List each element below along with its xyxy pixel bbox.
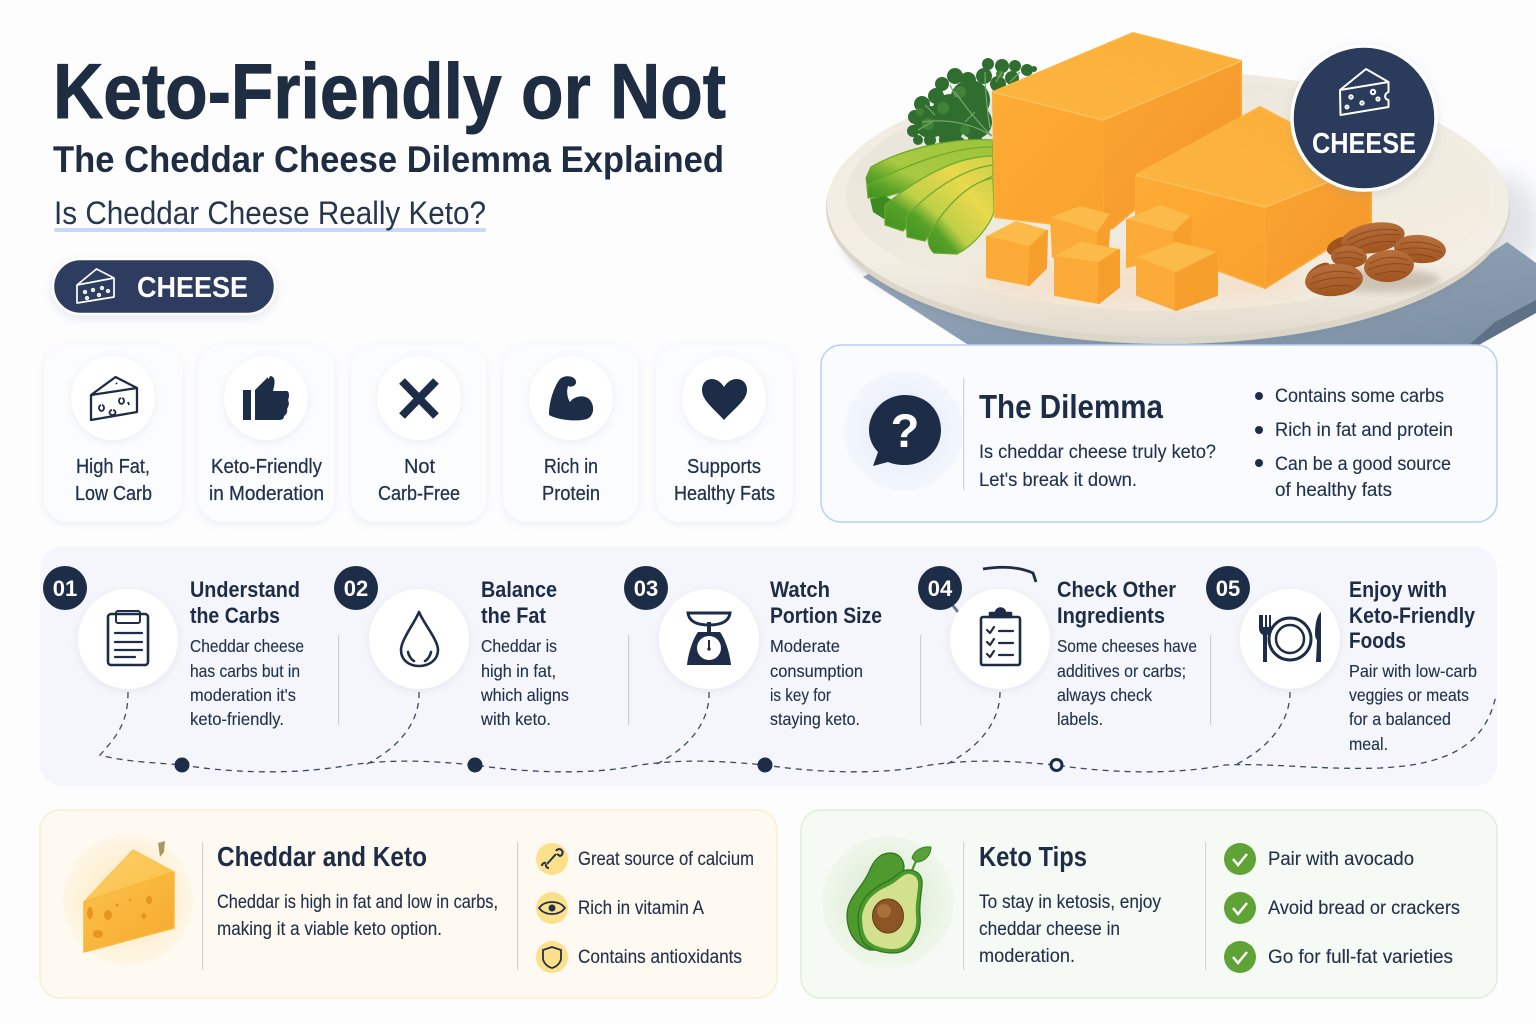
title: Keto-Friendly or Not xyxy=(53,47,726,135)
step 03: Watch xyxy=(770,577,830,602)
step 04: Ingredients xyxy=(1057,603,1165,628)
tip: full-fat xyxy=(1224,941,1453,973)
benefit card: keto-friendly: in Moderation xyxy=(209,483,324,505)
step 03: Moderate xyxy=(770,636,840,656)
step 01: moderation it's xyxy=(190,685,296,705)
step 04: always check xyxy=(1057,685,1152,705)
dilemma bullet list: Can be a good source xyxy=(1275,454,1451,475)
icon: heart xyxy=(702,379,747,420)
step 05: Enjoy with xyxy=(1349,577,1447,602)
tip: bread xyxy=(1224,892,1460,924)
almonds xyxy=(1303,218,1447,298)
plate xyxy=(826,71,1510,346)
step 01: the Carbs xyxy=(190,603,280,628)
step 01: Understand xyxy=(190,577,300,602)
step 03: is key for xyxy=(770,685,831,705)
item: calcium xyxy=(536,843,754,875)
icon: nutrition label xyxy=(108,611,148,665)
icon: cheese xyxy=(91,377,137,420)
benefit card: high fat: High Fat, xyxy=(76,456,150,478)
panel: keto tips xyxy=(801,810,1497,998)
panel: the dilemma: The Dilemma xyxy=(979,388,1164,425)
step 05: meal. xyxy=(1349,734,1388,754)
step 05: for a balanced xyxy=(1349,709,1451,729)
step 03: staying keto. xyxy=(770,709,860,729)
benefit card: healthy fats: Supports xyxy=(687,456,761,478)
tip: full-fat: Go for full-fat varieties xyxy=(1268,947,1453,968)
dilemma bullet list: Rich in fat and protein xyxy=(1275,420,1453,441)
icon: cheese wedge xyxy=(77,269,114,303)
panel: cheddar and keto: Cheddar is high in fat and low in carbs, xyxy=(217,892,498,913)
avocado slices xyxy=(866,140,994,254)
tip: avocado: Pair with avocado xyxy=(1268,849,1414,870)
benefit card: healthy fats xyxy=(656,345,793,522)
step 01: keto-friendly. xyxy=(190,709,284,729)
item: antioxidants xyxy=(536,941,742,973)
step 05 xyxy=(1206,566,1477,754)
step 02: 02 xyxy=(344,576,368,601)
panel: keto tips: cheddar cheese in xyxy=(979,919,1120,940)
parsley xyxy=(907,58,1037,147)
second cheese block xyxy=(1136,107,1371,288)
hero image: cheddar plate xyxy=(826,33,1536,346)
panel: cheddar and keto: Cheddar and Keto xyxy=(217,841,427,872)
cheese round badge: CHEESE xyxy=(1312,128,1416,160)
step 05: Keto-Friendly xyxy=(1349,603,1475,628)
step 02: which aligns xyxy=(480,685,569,705)
step 04: 04 xyxy=(928,576,953,601)
step 01: Cheddar cheese xyxy=(190,636,304,656)
step 04: Check Other xyxy=(1057,577,1176,602)
step 01 xyxy=(43,566,304,729)
panel: keto tips: To stay in ketosis, enjoy xyxy=(979,892,1161,913)
step 01: has carbs but in xyxy=(190,661,300,681)
napkin xyxy=(863,175,1536,346)
tip: avocado xyxy=(1224,843,1414,875)
step 04 xyxy=(918,566,1197,729)
icon: cheese xyxy=(1340,69,1388,115)
icon: question bubble xyxy=(869,395,941,466)
icon: droplet xyxy=(401,612,438,666)
dilemma bullet list: Contains some carbs xyxy=(1275,386,1444,407)
dilemma bullet list xyxy=(1255,386,1453,501)
panel: the dilemma: Is cheddar cheese truly keto? xyxy=(979,442,1216,463)
step 02 xyxy=(334,566,569,729)
item: vitamin A: Rich in vitamin A xyxy=(578,898,704,919)
illustration: cheese wedge xyxy=(84,841,174,952)
benefit card: high fat: Low Carb xyxy=(75,483,152,505)
item: calcium: Great source of calcium xyxy=(578,849,754,870)
tip: bread: Avoid bread or crackers xyxy=(1268,898,1460,919)
large cheese block xyxy=(993,33,1241,230)
dilemma bullet list: of healthy fats xyxy=(1275,480,1392,501)
benefit card: keto-friendly: Keto-Friendly xyxy=(211,456,322,478)
cheese pill badge xyxy=(53,259,275,314)
benefit card: keto-friendly xyxy=(198,345,335,522)
step 05: Foods xyxy=(1349,628,1406,653)
icon: plate and cutlery xyxy=(1259,612,1321,662)
benefit card: not carb-free xyxy=(351,345,487,522)
item: antioxidants: Contains antioxidants xyxy=(578,947,742,968)
icon: checklist xyxy=(981,608,1020,665)
icon: flexed arm xyxy=(549,376,593,420)
cheese round badge xyxy=(1292,46,1436,190)
step 03: 03 xyxy=(634,576,658,601)
step 01: 01 xyxy=(53,576,77,601)
step 03: consumption xyxy=(770,661,863,681)
benefit card: protein: Protein xyxy=(542,483,600,505)
benefit card: healthy fats: Healthy Fats xyxy=(674,483,775,505)
step 05: 05 xyxy=(1216,576,1240,601)
benefit card: not carb-free: Carb-Free xyxy=(378,483,460,505)
benefit card: protein: Rich in xyxy=(544,456,598,478)
cheese cubes xyxy=(987,206,1217,310)
step 04: additives or carbs; xyxy=(1057,661,1186,681)
panel: keto tips: Keto Tips xyxy=(979,841,1087,872)
panel: keto tips: moderation. xyxy=(979,946,1075,967)
step 03: Portion Size xyxy=(770,603,882,628)
panel: steps xyxy=(40,547,1497,786)
panel: cheddar and keto: making it a viable keto option. xyxy=(217,919,442,940)
step 05: Pair with low-carb xyxy=(1349,661,1477,681)
step 05: veggies or meats xyxy=(1349,685,1469,705)
step 02: with keto. xyxy=(480,709,551,729)
illustration: avocado xyxy=(847,847,931,953)
cheese pill badge: CHEESE xyxy=(137,272,248,304)
step 03 xyxy=(624,566,882,729)
icon: thumbs up xyxy=(243,376,289,420)
benefit card: high fat xyxy=(44,345,182,522)
subtitle: The Cheddar Cheese Dilemma Explained xyxy=(53,139,724,180)
item: vitamin A xyxy=(536,892,704,924)
panel: the dilemma xyxy=(821,345,1497,522)
step 02: the Fat xyxy=(481,603,546,628)
step 04: labels. xyxy=(1057,709,1103,729)
panel: the dilemma: Let's break it down. xyxy=(979,470,1137,491)
step 02: Balance xyxy=(481,577,557,602)
question heading with underline: Is Cheddar Cheese Really Keto? xyxy=(54,195,486,231)
icon: scale xyxy=(687,613,731,665)
icon: cross xyxy=(402,381,436,416)
benefit card: not carb-free: Not xyxy=(404,456,435,478)
dashed connector path xyxy=(100,692,1496,772)
step 02: Cheddar is xyxy=(481,636,557,656)
icon: question bubble: ? xyxy=(891,404,919,457)
step 04: Some cheeses have xyxy=(1057,636,1197,656)
benefit card: protein xyxy=(503,345,639,522)
step 02: high in fat, xyxy=(481,661,556,681)
panel: cheddar and keto xyxy=(40,810,777,998)
